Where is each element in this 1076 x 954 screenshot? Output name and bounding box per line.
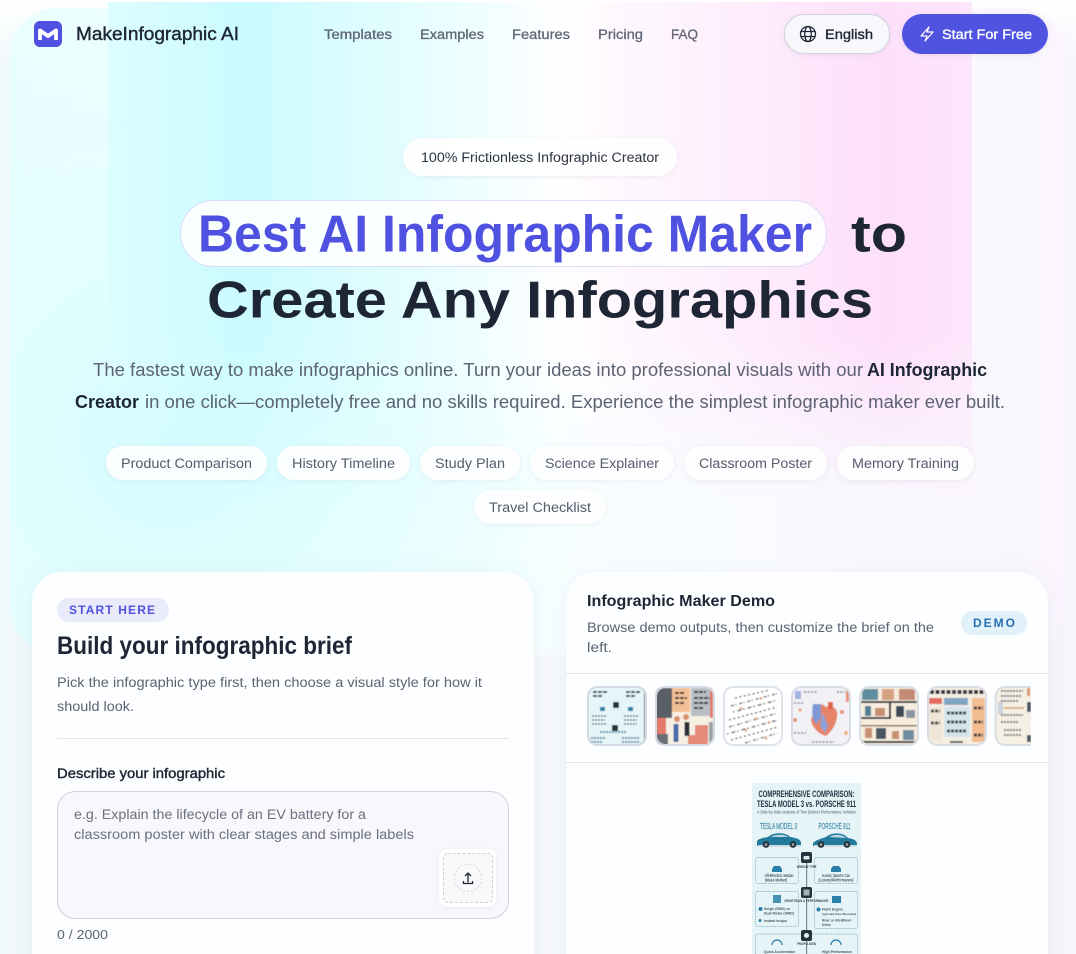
chip: classroom poster [684,446,827,480]
character counter: 0 / 2000 [57,927,108,942]
row: propulsion: Quick Acceleration [764,949,795,954]
demo description: Browse demo outputs, then customize the brief on the [587,620,934,635]
chip: history timeline [277,446,410,480]
row: drivetrain and performance: Dual Motor (AWD) [764,910,795,916]
headline: to [851,206,907,264]
language button [784,14,890,54]
connector [806,855,807,954]
chip: travel checklist [474,490,606,524]
chip: science explainer: Science Explainer [545,456,660,471]
hero description: AI Infographic [867,360,987,380]
form description [57,675,482,714]
form heading: Build your infographic brief [57,632,353,660]
chip: study plan: Study Plan [435,456,505,471]
logo [34,21,62,47]
chip: product comparison: Product Comparison [121,456,252,471]
row: vehicle type: (Luxury/Performance) [818,878,854,882]
row: propulsion [756,930,858,954]
demo heading: Infographic Maker Demo [587,593,775,610]
thumbnail strip [587,686,1055,746]
chip: memory training [837,446,974,480]
row: drivetrain and performance: Drive [822,922,832,927]
thumbnail: text poster, clipped [994,686,1031,746]
demo preview poster: Tesla Model 3 vs Porsche 911 [752,783,861,954]
poster column labels: PORSCHE 911 [818,822,851,831]
prompt textarea: e.g. Explain the lifecycle of an EV battery for a [74,807,367,822]
navigation links: Features [512,27,570,42]
start here tag [57,598,169,622]
thumbnail: history collage [655,686,715,746]
poster column labels: TESLA MODEL 3 [760,822,797,831]
poster title [757,789,856,810]
row: drivetrain and performance: Instant torque [764,918,788,923]
demo tag [961,611,1027,635]
language button: English [825,27,873,42]
brand name: MakeInfographic AI [76,24,239,44]
hero description: in one click—completely free and no skills required. Experience the simplest infographic maker ever built. [145,392,1005,412]
poster title: COMPREHENSIVE COMPARISON: [758,789,854,800]
thumbnail: heart anatomy [791,686,851,746]
car: porsche [813,833,857,848]
row: vehicle type: (Mass Market) [765,878,787,882]
hero description: The fastest way to make infographics online. Turn your ideas into professional visuals with our [93,360,863,380]
field label: Describe your infographic [57,766,225,781]
prompt textarea [58,792,508,918]
start for free button: Start For Free [942,27,1032,42]
hero badge [403,138,677,176]
hero badge: 100% Frictionless Infographic Creator [421,150,660,165]
navigation links: FAQ [671,27,698,42]
chip: study plan [420,446,520,480]
row: vehicle type [756,852,858,884]
row: drivetrain and performance: Rear or All-Wheel [822,918,851,922]
chip: memory training: Memory Training [852,456,959,471]
thumbnail: colour blocks [927,686,987,746]
car: tesla [757,833,801,848]
start here tag: START HERE [69,603,155,617]
headline [180,200,907,330]
row: drivetrain and performance: Single (RWD) or [764,906,790,911]
form description: Pick the infographic type first, then choose a visual style for how it [57,675,482,690]
form description: should look. [57,699,134,714]
example prompt chips [106,446,974,524]
thumbnail: comic panels [859,686,919,746]
chip: history timeline: History Timeline [292,456,395,471]
row: drivetrain and performance: Flat-6 Engine [822,906,844,912]
row: vehicle type: VEHICLE TYPE [796,865,817,869]
page background [0,0,1076,647]
chip: classroom poster: Classroom Poster [699,456,813,471]
navigation links: Examples [420,27,484,42]
row: drivetrain and performance [756,887,858,928]
chip: product comparison [106,446,267,480]
hero description [75,360,1005,412]
chip: travel checklist: Travel Checklist [489,500,591,515]
thumbnail: scattered text map [723,686,783,746]
row: propulsion: High Performance [822,949,853,954]
icon: upload button [439,849,496,907]
chip: science explainer [530,446,674,480]
headline: Best AI Infographic Maker [198,206,812,264]
navigation links: Pricing [598,27,643,42]
navigation links: Templates [324,27,392,42]
row: propulsion: PROPULSION [797,942,816,946]
headline: Create Any Infographics [207,272,873,330]
panel: build your infographic brief [32,572,534,954]
panel: infographic maker demo [566,572,1055,954]
demo description [587,620,934,655]
row: drivetrain and performance: (typically Rear-Mounted) [822,912,856,916]
poster subtitle: A Side-by-Side Analysis of Two Distinct Performance Vehicles [757,810,857,814]
demo tag: DEMO [973,616,1015,630]
row: vehicle type: Iconic Sports Car [822,873,850,878]
demo description: left. [587,640,612,655]
start for free button [902,14,1048,54]
hero description: Creator [75,392,139,412]
poster column labels [760,822,851,831]
row: drivetrain and performance: DRIVETRAIN & PERFORMANCE [784,899,829,903]
prompt textarea: classroom poster with clear stages and simple labels [74,827,414,842]
row: vehicle type: All-Electric Sedan [764,873,794,878]
poster title: TESLA MODEL 3 vs. PORSCHE 911 [757,799,856,810]
thumbnail: comparison [587,686,647,746]
navigation links [324,27,698,42]
